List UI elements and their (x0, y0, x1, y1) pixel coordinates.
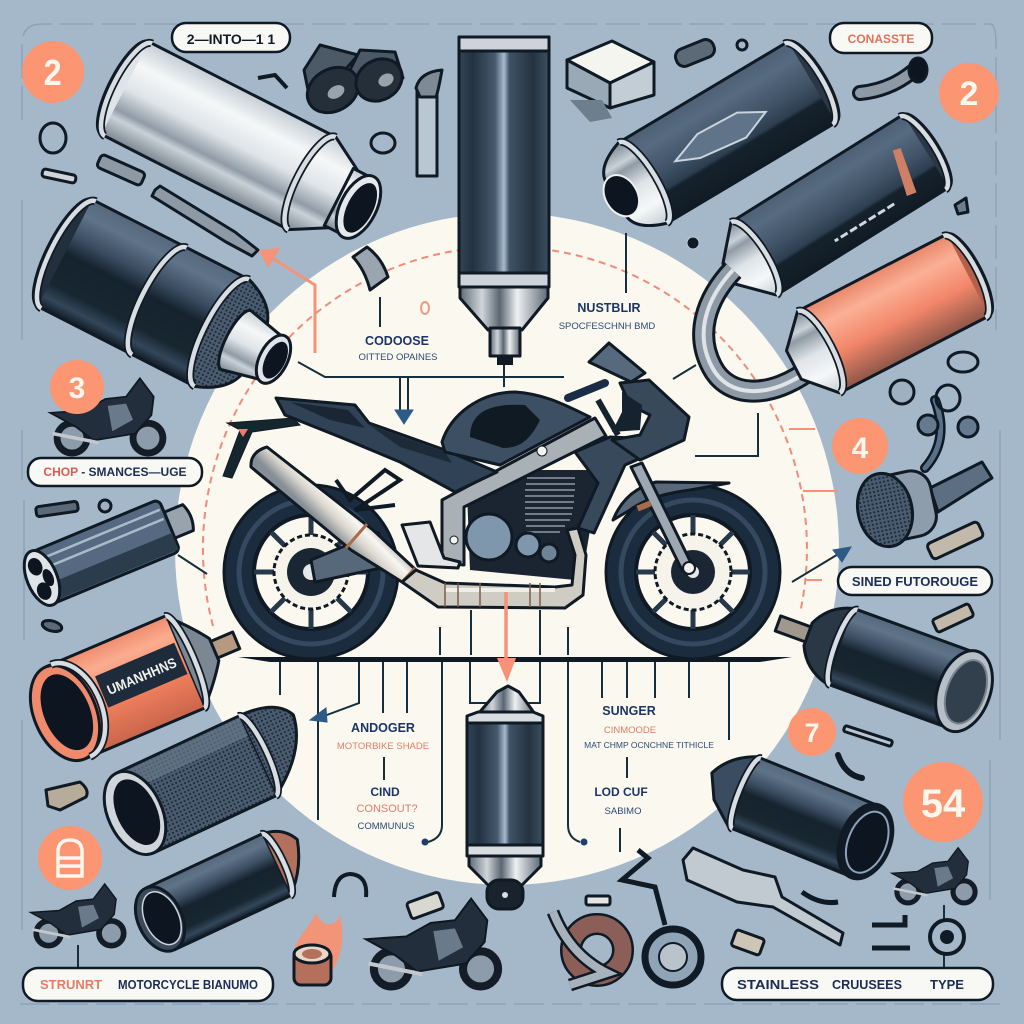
muffler: left triple outlet (17, 490, 202, 611)
footpeg (402, 522, 460, 568)
motorcycle (223, 343, 792, 662)
number badge: 2 top-left: 2 (44, 53, 62, 93)
callout: andoger: MOTORBIKE SHADE (337, 741, 429, 752)
label: 2-into-1: 2—INTO—1 1 (187, 31, 275, 47)
bent pipe (704, 270, 812, 391)
label: bottom left: STRUNRT (40, 977, 102, 992)
seat and tail (276, 398, 497, 492)
fork (631, 463, 693, 570)
label: right (838, 567, 992, 595)
handlebar (568, 383, 605, 398)
muffler: top-left silver (87, 34, 398, 261)
front fender (613, 482, 729, 520)
main frame (442, 418, 606, 565)
parts: top-left accessories (40, 45, 442, 256)
callout: codoose: OITTED OPAINES (358, 352, 438, 363)
callout: codoose: CODOOSE (365, 334, 429, 348)
muffler: left coral: UMANHHNS (104, 654, 179, 698)
label: left: CHOP - SMANCES—UGE (43, 465, 187, 479)
muffler: lower right dark (695, 742, 903, 887)
callout: nustblir: NUSTBLIR (577, 301, 641, 315)
callout: cind: COMMUNUS (358, 821, 414, 832)
parts: top-right accessories (567, 37, 968, 249)
muffler: top-right dark (584, 34, 848, 244)
parts: right side accessories (838, 352, 992, 778)
callout: cind: CONSOUT? (356, 803, 418, 815)
rear wheel (224, 485, 398, 659)
callout: sunger (584, 704, 714, 750)
number badge: 2 top-left (22, 41, 84, 103)
small navy arrows (310, 410, 851, 722)
upper fairing (612, 380, 689, 460)
callout: sunger: MAT CHMP OCNCHNE TITHICLE (584, 740, 714, 750)
silver exhaust (251, 447, 416, 582)
central cream circle (175, 213, 839, 885)
parts: bottom-right wheel stand (872, 915, 964, 954)
number badge: 3: 3 (69, 372, 85, 405)
front wheel (606, 485, 780, 659)
label: bottom right: TYPE (930, 977, 964, 992)
engine covers (466, 514, 558, 562)
muffler: right dark (706, 108, 960, 310)
muffler: top centre vertical (459, 37, 549, 365)
mini bike: bottom right (892, 848, 975, 903)
label: bottom right (722, 968, 993, 1000)
callout: nustblir: SPOCFESCHNH BMD (559, 321, 655, 332)
callout: cind: CIND (370, 785, 400, 799)
callout: cind (356, 785, 418, 832)
muffler: bottom-left dark (126, 821, 318, 959)
number badge: 7 (788, 708, 836, 756)
muffler: bottom centre vertical (467, 686, 543, 909)
number badge: 7: 7 (804, 718, 820, 748)
muffler: right coral (773, 228, 1002, 406)
number badge: 4: 4 (852, 432, 869, 465)
icon badge: bottom-left (38, 826, 102, 890)
fuel tank (442, 392, 590, 465)
number badge: 54: 54 (921, 782, 966, 826)
callout: andoger (337, 721, 429, 752)
coral ring mark (421, 302, 429, 314)
label: 2-into-1 (172, 23, 290, 52)
number badge: 3 (50, 360, 104, 414)
callout: nustblir (559, 301, 655, 332)
swingarm (311, 532, 395, 582)
number badge: 2 top-right: 2 (960, 75, 978, 113)
dashed coral arc (203, 247, 807, 626)
mini bike: bottom left (31, 884, 124, 946)
label: top right (830, 23, 932, 53)
callout: sunger: CINMOODE (604, 725, 656, 736)
mini bike: left (50, 378, 163, 453)
muffler: right lower dark (764, 584, 1003, 740)
header collector (402, 528, 586, 608)
label: right: SINED FUTOROUGE (852, 574, 978, 589)
label: bottom left (23, 968, 273, 1001)
muffler: small silver bottom right (683, 848, 843, 945)
label: bottom left: MOTORCYCLE BIANUMO (118, 977, 258, 992)
callout: lod cuf: SABIMO (605, 806, 641, 817)
label: left (28, 458, 202, 486)
number badge: 2 top-right (939, 63, 999, 123)
ground line (238, 657, 792, 662)
label: top right: CONASSTE (848, 32, 914, 46)
drop pipe (353, 247, 388, 290)
lower fairing (575, 437, 682, 533)
callout: lod cuf: LOD CUF (594, 785, 648, 799)
rear bracket (336, 470, 400, 510)
label: bottom right: STAINLESS (737, 977, 819, 992)
muffler: carbon lower-left (92, 695, 321, 864)
parts: bottom accessories (292, 850, 838, 985)
connector lines (78, 233, 944, 968)
muffler: left coral (17, 594, 256, 771)
callout: codoose (358, 334, 438, 363)
muffler: left dark (22, 191, 313, 419)
parts: left side accessories (36, 500, 111, 810)
engine block (467, 470, 600, 580)
tail subframe (223, 418, 300, 478)
mini bike: bottom centre (366, 899, 498, 986)
windscreen (589, 343, 645, 382)
number badge: 4 (832, 418, 888, 474)
coral marks on arc (789, 429, 838, 580)
callout: andoger: ANDOGER (351, 721, 415, 735)
number badge: 54 (903, 762, 983, 842)
callout: lod cuf (594, 785, 648, 817)
callout: sunger: SUNGER (602, 704, 656, 718)
coral arrow: to bottom muffler (497, 592, 516, 682)
engine fins (525, 478, 575, 532)
label: bottom right: CRUUSEES (832, 977, 902, 992)
coral arrow: to left part (259, 248, 315, 353)
